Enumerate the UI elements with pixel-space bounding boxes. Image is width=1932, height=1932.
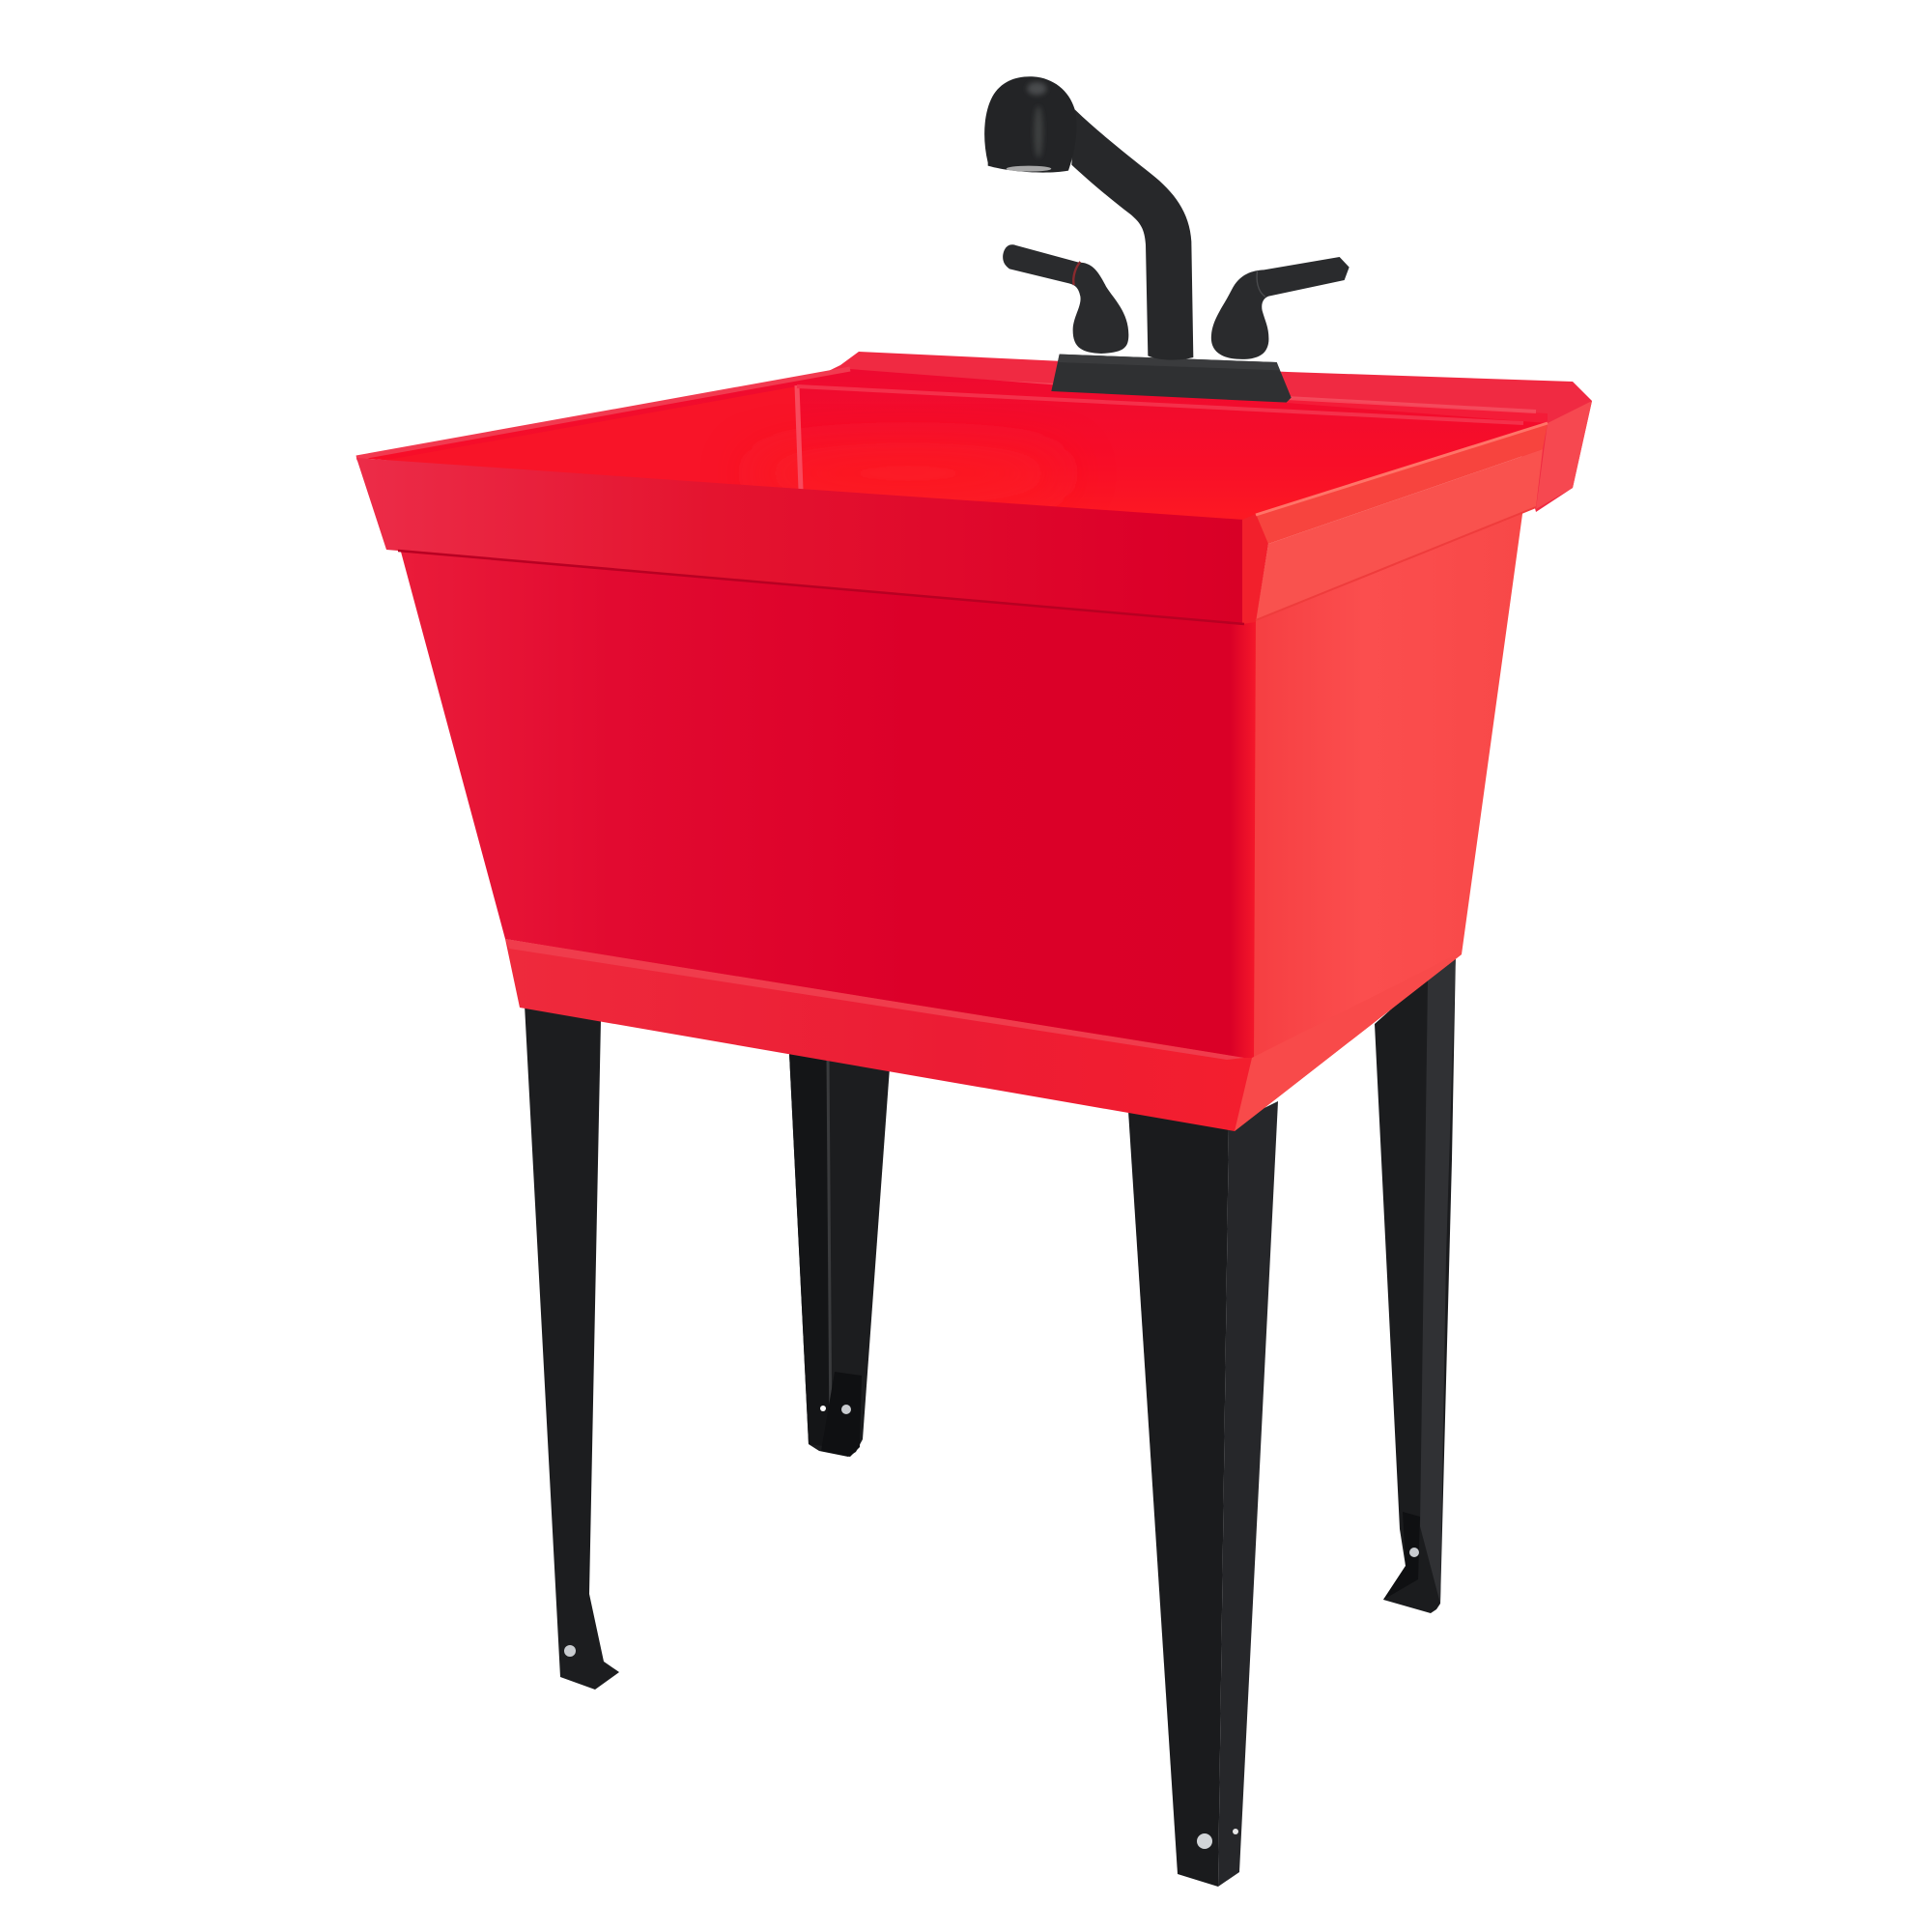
faucet spray head [984, 76, 1077, 173]
leg bracket [820, 1372, 862, 1457]
side rim band [1242, 423, 1548, 624]
leg: back left [789, 1053, 890, 1457]
sink tub [356, 352, 1592, 1131]
right handle [1211, 257, 1350, 359]
faucet base [1051, 355, 1292, 403]
faucet [984, 76, 1350, 403]
faucet spout [1071, 109, 1193, 360]
lower band [505, 939, 1254, 1131]
back ledge [797, 352, 1592, 512]
front rim band [356, 458, 1244, 623]
left handle [1003, 244, 1128, 354]
leg: front [1128, 1101, 1278, 1887]
leg: front left [525, 1005, 619, 1690]
tub right side [1235, 507, 1523, 1131]
leg: back right [1375, 952, 1456, 1613]
tub front body [398, 541, 1256, 1063]
tub interior [356, 369, 1548, 526]
